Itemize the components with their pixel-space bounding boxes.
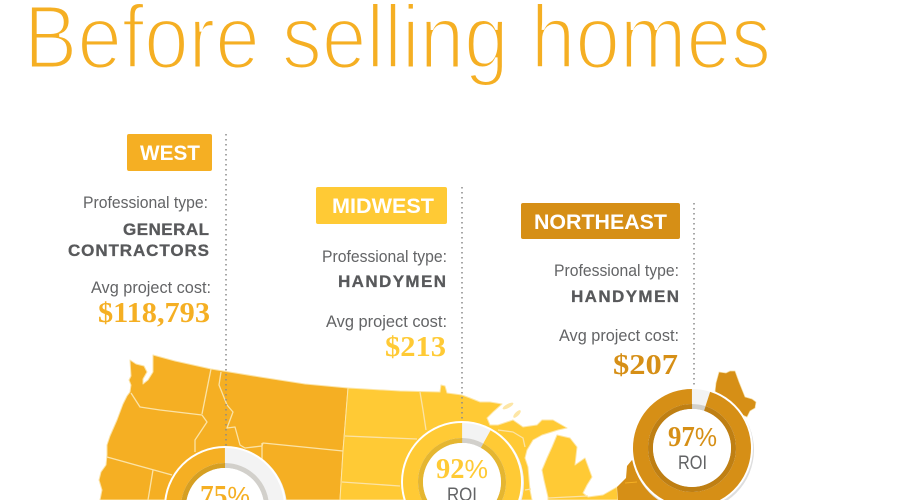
donut: Northeast 97% ROI: [627, 383, 757, 500]
badge: Midwest: MIDWEST: [332, 195, 434, 218]
percent label: 92%: [436, 454, 488, 485]
map of the United States: [99, 355, 756, 500]
badge: Northeast: NORTHEAST: [534, 211, 667, 234]
professional type label: Professional type:: [554, 261, 679, 280]
professional type value: HANDYMEN: [338, 272, 446, 291]
professional type value: GENERAL: [123, 220, 209, 239]
cost label: Avg project cost:: [559, 326, 679, 345]
dotted line: Midwest: [461, 187, 463, 422]
cost value: $213: [385, 331, 446, 363]
cost label: Avg project cost:: [91, 278, 211, 297]
dotted line: Northeast: [693, 203, 695, 390]
badge: Northeast: [521, 203, 680, 239]
donut: West 75% ROI: [164, 446, 287, 500]
cost value: $118,793: [98, 297, 210, 329]
professional type label: Professional type:: [83, 193, 208, 212]
professional type value: [68, 220, 209, 260]
panel: Northeast: [521, 203, 680, 381]
panel: Midwest: [316, 187, 447, 363]
dotted line: West: [225, 134, 227, 448]
professional type value: HANDYMEN: [571, 287, 679, 306]
map region: Midwest: [340, 385, 618, 500]
badge: West: [127, 134, 212, 171]
donut: Midwest 92% ROI: [392, 412, 532, 500]
ROI label: ROI: [678, 453, 707, 474]
panel: West: [68, 134, 212, 329]
cost label: Avg project cost:: [326, 312, 447, 331]
map region: West: [99, 355, 348, 500]
professional type value: CONTRACTORS: [68, 241, 209, 260]
cost value: $207: [613, 349, 678, 381]
badge: Midwest: [316, 187, 447, 224]
badge: West: WEST: [140, 142, 200, 165]
map region: Northeast: [617, 371, 756, 500]
percent label: 97%: [668, 422, 717, 453]
professional type label: Professional type:: [322, 247, 447, 266]
